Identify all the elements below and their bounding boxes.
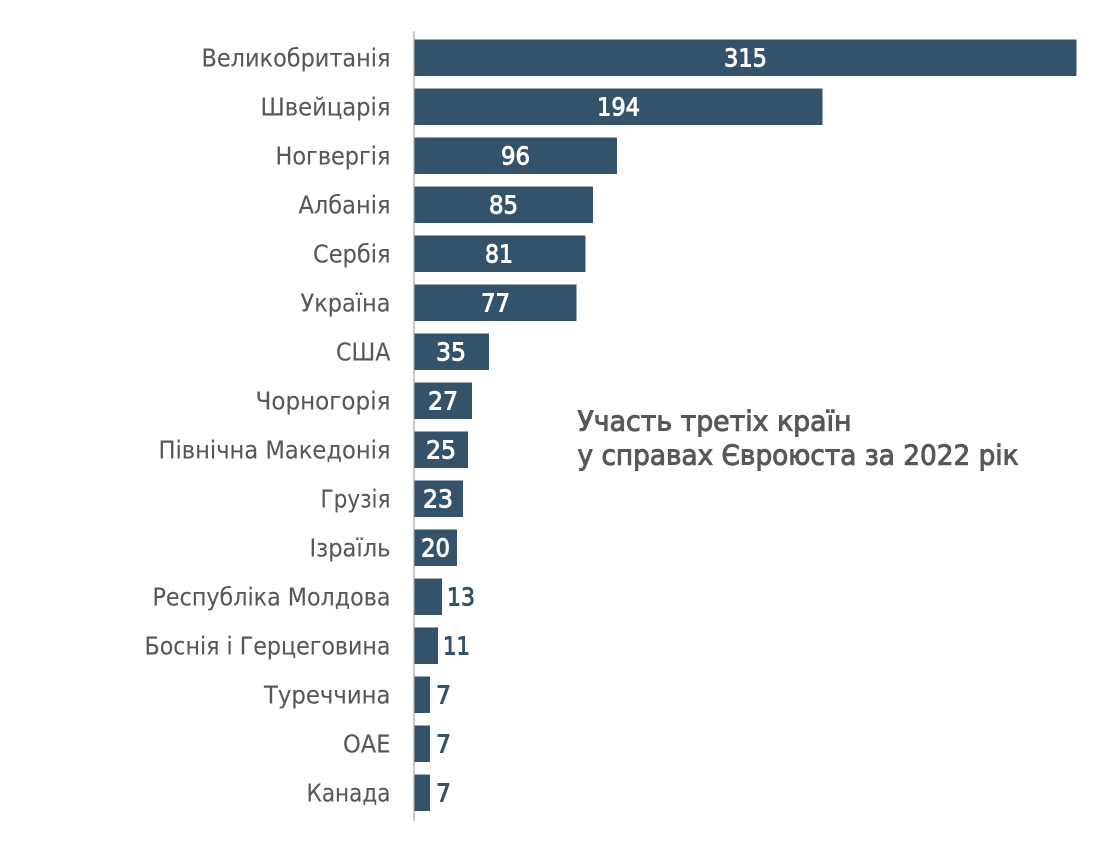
row: Албанія	[298, 186, 593, 223]
row: США: США	[336, 338, 391, 366]
chart title	[578, 404, 1018, 472]
row: Ізраїль: 20	[421, 534, 450, 562]
row: Боснія і Герцеговина	[144, 628, 470, 664]
row: Грузія	[320, 480, 463, 517]
row: Туреччина	[263, 676, 451, 713]
row: Великобританія	[202, 40, 1076, 76]
row: Північна Македонія: Північна Македонія	[158, 436, 390, 464]
row: Великобританія: Великобританія	[202, 44, 390, 72]
row: Чорногорія: Чорногорія	[256, 386, 390, 416]
row: ОАЕ	[343, 726, 451, 762]
row: Ногвергія	[276, 138, 617, 174]
row: Сербія	[313, 236, 586, 272]
row: Чорногорія	[256, 382, 472, 419]
row: Албанія: 85	[489, 190, 518, 220]
row: Туреччина: 7	[436, 680, 451, 710]
row: Республіка Молдова: Республіка Молдова	[152, 582, 390, 612]
row: Україна: Україна	[300, 288, 390, 318]
row: Великобританія: 315	[724, 44, 767, 72]
row: Швейцарія: 194	[597, 92, 640, 122]
chart title: Участь третіх країн	[578, 404, 852, 438]
row: Албанія: Албанія	[298, 190, 390, 220]
row: Швейцарія	[260, 88, 822, 125]
chart title: у справах Євроюста за 2022 рік	[578, 438, 1018, 472]
row: Боснія і Герцеговина: 11	[443, 632, 470, 660]
row: Ізраїль: Ізраїль	[310, 534, 390, 562]
row: Грузія: 23	[423, 484, 453, 514]
row: Канада: Канада	[306, 778, 390, 808]
row: Ногвергія: Ногвергія	[276, 142, 390, 170]
row: Сербія: 81	[485, 240, 513, 268]
row: Туреччина: Туреччина	[263, 680, 390, 710]
row: Швейцарія: Швейцарія	[260, 92, 390, 122]
row: Республіка Молдова	[152, 578, 475, 615]
row: Україна	[300, 284, 576, 321]
row: Республіка Молдова: 13	[447, 582, 475, 612]
row: Канада	[306, 774, 451, 811]
row: Ізраїль	[310, 530, 457, 566]
row: США: 35	[436, 338, 466, 366]
row: Ногвергія: 96	[501, 142, 530, 170]
row: Чорногорія: 27	[428, 386, 458, 416]
row: Канада: 7	[436, 778, 451, 808]
row: Північна Македонія: 25	[426, 436, 456, 464]
row: Боснія і Герцеговина: Боснія і Герцеговина	[144, 632, 390, 660]
row: Грузія: Грузія	[320, 484, 390, 514]
row: США	[336, 334, 489, 370]
row: ОАЕ: ОАЕ	[343, 730, 390, 758]
row: Сербія: Сербія	[313, 240, 390, 268]
row: ОАЕ: 7	[436, 730, 451, 758]
row: Україна: 77	[481, 288, 510, 318]
row: Північна Македонія	[158, 432, 468, 468]
